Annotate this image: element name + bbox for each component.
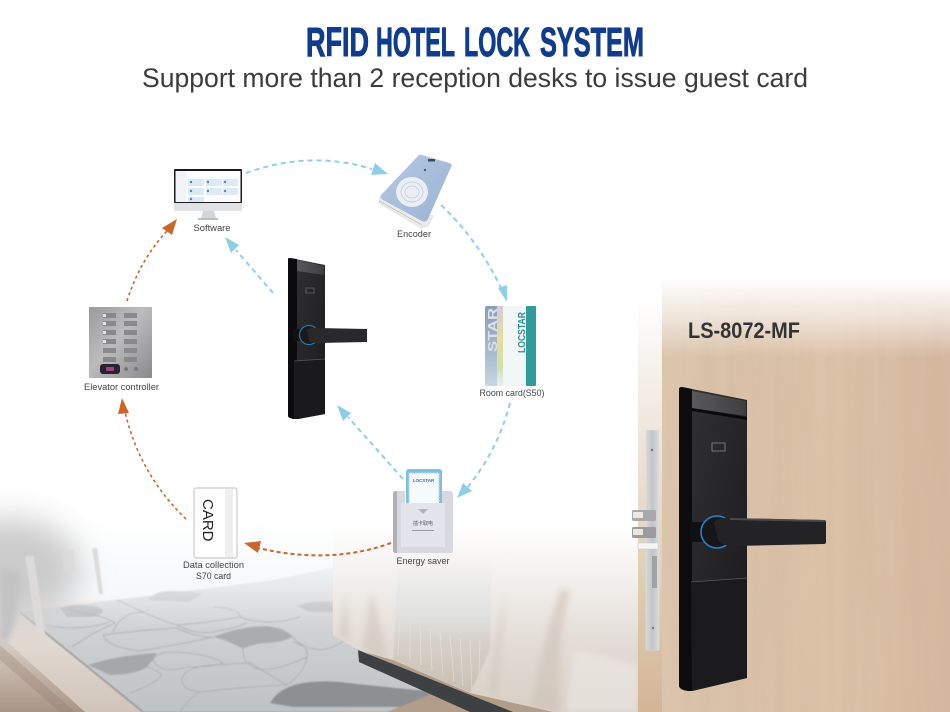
chair shadow bbox=[0, 518, 80, 622]
bed folds bbox=[338, 590, 638, 712]
bed sheet bbox=[333, 549, 638, 712]
window light bbox=[0, 525, 345, 615]
LOCSTAR brand: LOCSTAR bbox=[517, 311, 528, 353]
room card bbox=[485, 306, 536, 386]
CARD text: CARD bbox=[199, 499, 216, 542]
chair seat bbox=[0, 570, 19, 643]
label: data collection S70 card: S70 card bbox=[196, 571, 231, 582]
wooden floor bbox=[0, 600, 345, 712]
inserted card bbox=[406, 469, 442, 505]
handle base bbox=[690, 522, 708, 542]
label: data collection S70 card: Data collection bbox=[183, 560, 244, 571]
label: data collection S70 card bbox=[183, 560, 244, 582]
encoder icon bbox=[379, 155, 452, 228]
card left stencil text: STAR bbox=[485, 307, 500, 352]
model name: LS-8072-MF bbox=[688, 318, 800, 343]
energy saver bbox=[393, 469, 453, 553]
data collection card bbox=[194, 488, 237, 558]
chair legs bbox=[25, 548, 103, 634]
label: room card: Room card(S50) bbox=[480, 388, 544, 399]
floor under bed bbox=[345, 640, 640, 712]
small lock bbox=[288, 258, 367, 419]
arrow: encoder to room card bbox=[441, 205, 507, 302]
blue ring bbox=[701, 516, 733, 548]
mortise plate and bolts bbox=[632, 430, 659, 650]
label: software: Software bbox=[194, 223, 230, 234]
card slot bbox=[692, 391, 746, 416]
title bbox=[306, 19, 644, 65]
subtitle: Support more than 2 reception desks to issue guest card bbox=[142, 63, 808, 93]
plate text: 插卡取电 bbox=[413, 520, 433, 527]
arrow: data card to elevator controller bbox=[118, 398, 186, 519]
arrow: small lock to software bbox=[225, 237, 273, 293]
label: energy saver: Energy saver bbox=[396, 556, 450, 567]
large lock on door bbox=[679, 387, 826, 691]
wooden door panel bbox=[662, 278, 950, 712]
blanket with fringe bbox=[393, 600, 490, 692]
arrow: energy saver to data card bbox=[244, 541, 391, 555]
floor plank highlights bbox=[0, 612, 143, 712]
rug stone outlines bbox=[45, 600, 345, 712]
arrow: elevator controller to software bbox=[127, 219, 177, 301]
card brand: LOCSTAR bbox=[413, 478, 435, 483]
label: encoder: Encoder bbox=[397, 229, 431, 240]
title: RFID bbox=[306, 19, 369, 65]
label: elevator controller: Elevator controller bbox=[84, 382, 159, 393]
handle bbox=[714, 518, 826, 546]
door edge strip bbox=[638, 300, 662, 712]
wall plate bbox=[393, 491, 453, 553]
rug bbox=[20, 565, 437, 712]
white fade over the left of the room bbox=[0, 470, 345, 630]
arrow: room card to energy saver bbox=[457, 403, 510, 498]
bedroom background photo bbox=[0, 504, 638, 712]
lower panel bbox=[691, 578, 747, 691]
title: SYSTEM bbox=[540, 19, 644, 65]
card logo bbox=[712, 443, 725, 451]
fringe strands bbox=[398, 618, 480, 690]
monitor icon: software bbox=[174, 169, 242, 220]
title: LOCK bbox=[464, 19, 530, 65]
title: HOTEL bbox=[376, 19, 455, 65]
dark bed base bbox=[358, 650, 513, 712]
elevator controller bbox=[89, 307, 152, 378]
arrow: energy saver to small lock bbox=[337, 405, 403, 479]
arrow: software to encoder bbox=[246, 160, 388, 175]
